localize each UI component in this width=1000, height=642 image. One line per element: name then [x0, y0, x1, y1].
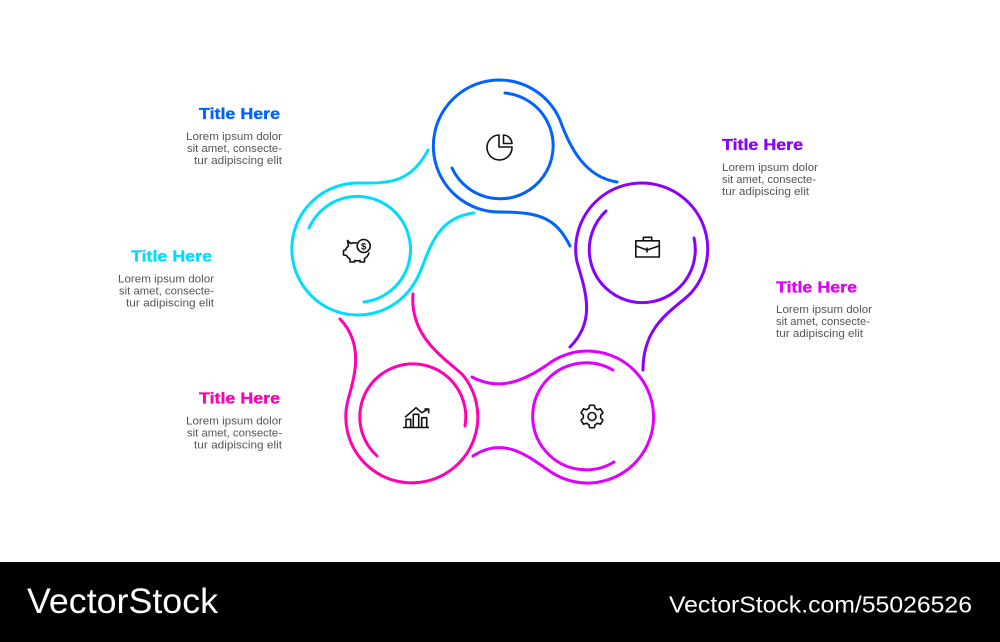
hot pink outer ribbon	[340, 294, 478, 483]
blue outer ribbon	[433, 80, 617, 246]
magenta heading: Title Here	[776, 280, 857, 296]
purple body text: sit amet, consecte-	[722, 174, 816, 186]
blue inner arc	[452, 93, 553, 199]
blue body text: Lorem ipsum dolor	[186, 131, 282, 143]
cyan body text: tur adipiscing elit	[126, 298, 214, 310]
step: blue	[186, 80, 617, 246]
icon: briefcase	[636, 237, 659, 257]
purple body text: tur adipiscing elit	[722, 186, 809, 198]
step: magenta	[472, 280, 872, 483]
purple body text: Lorem ipsum dolor	[722, 162, 818, 174]
hot pink heading: Title Here	[199, 390, 280, 408]
hot pink body text: tur adipiscing elit	[194, 440, 282, 452]
purple inner arc	[589, 211, 695, 303]
icon: piggy bank: $	[361, 242, 367, 252]
magenta body text: sit amet, consecte-	[776, 316, 870, 328]
blue body text: sit amet, consecte-	[187, 143, 282, 155]
cyan body text	[118, 274, 214, 310]
cyan body text: sit amet, consecte-	[119, 286, 214, 298]
magenta body text: tur adipiscing elit	[776, 328, 863, 340]
hot pink body text	[186, 416, 282, 452]
magenta body text: Lorem ipsum dolor	[776, 304, 872, 316]
purple body text	[722, 162, 818, 198]
step: hot pink	[186, 294, 478, 483]
footer image id: VectorStock.com/55026526	[669, 592, 972, 618]
cyan body text: Lorem ipsum dolor	[118, 274, 214, 286]
footer bar	[0, 562, 1000, 642]
hot pink inner arc	[360, 364, 466, 456]
hot pink body text: sit amet, consecte-	[187, 428, 282, 440]
icon: growth chart	[403, 408, 429, 428]
purple heading: Title Here	[722, 137, 803, 154]
cyan heading: Title Here	[131, 248, 212, 266]
magenta inner arc	[533, 363, 614, 470]
blue heading: Title Here	[199, 106, 280, 123]
cyan inner arc	[309, 196, 410, 302]
icon: pie chart	[487, 135, 512, 160]
blue body text	[186, 131, 282, 167]
step: cyan	[118, 150, 474, 315]
icon: gear	[581, 405, 603, 428]
magenta body text	[776, 304, 872, 340]
icon: piggy bank	[344, 240, 370, 262]
blue body text: tur adipiscing elit	[194, 155, 282, 167]
step: purple	[570, 137, 818, 370]
hot pink body text: Lorem ipsum dolor	[186, 416, 282, 428]
footer logo text: VectorStock	[27, 582, 219, 621]
cyan outer ribbon	[292, 150, 474, 315]
magenta outer ribbon	[472, 351, 654, 483]
purple outer ribbon	[570, 183, 708, 370]
